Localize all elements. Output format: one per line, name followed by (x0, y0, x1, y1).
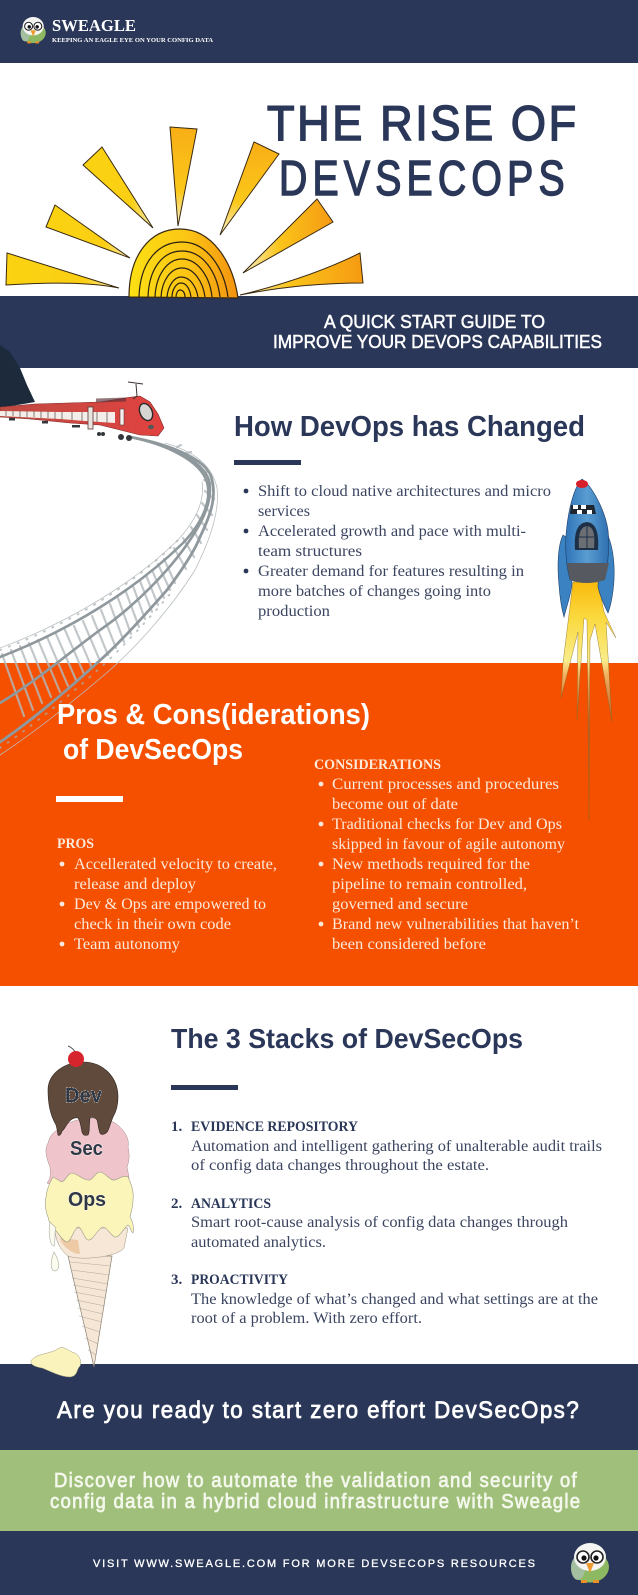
bullet list: how DevOps has changed: team structures (258, 543, 362, 560)
logo tagline: KEEPING AN EAGLE EYE ON YOUR CONFIG DATA (52, 37, 213, 44)
illustration: rocket (558, 479, 616, 820)
item 3: proactivity: 3. (171, 1272, 182, 1288)
item 2: analytics: automated analytics. (191, 1234, 326, 1251)
bullet list: how DevOps has changed: Greater demand for features resulting in (258, 563, 524, 580)
cherry (68, 1046, 84, 1067)
call to action band (0, 1364, 638, 1450)
discover text (50, 1470, 580, 1513)
heading: How DevOps has Changed: How DevOps has Changed (234, 411, 585, 443)
item 3: proactivity: The knowledge of what’s changed and what settings are at the (191, 1291, 598, 1308)
heading: Pros & Cons(iderations) of DevSecOps (57, 699, 370, 766)
pros list: PROS (57, 836, 94, 852)
footer link text: VISIT WWW.SWEAGLE.COM FOR MORE DEVSECOPS RESOURCES (93, 1558, 535, 1570)
item 3: proactivity (171, 1272, 598, 1327)
heading: Pros & Cons(iderations) of DevSecOps: Pros & Cons(iderations) (57, 699, 370, 731)
rocket fins (558, 532, 614, 617)
subtitle text: IMPROVE YOUR DEVOPS CAPABILITIES (273, 332, 602, 352)
bullet list: how DevOps has changed: services (258, 503, 310, 520)
panel: pros and considerations (56, 699, 580, 953)
heading: Pros & Cons(iderations) of DevSecOps: of DevSecOps (63, 734, 243, 766)
pros list: check in their own code (74, 916, 231, 933)
pros list: Accellerated velocity to create, (74, 856, 277, 873)
item 1: evidence repository: EVIDENCE REPOSITORY (191, 1119, 358, 1135)
item 1: evidence repository: 1. (171, 1119, 182, 1135)
scoop labels (65, 1085, 106, 1211)
footer band (0, 1531, 638, 1595)
cone (68, 1256, 112, 1367)
item 1: evidence repository (171, 1119, 602, 1174)
heading rule (171, 1085, 238, 1090)
considerations list: Traditional checks for Dev and Ops (332, 816, 562, 833)
heading: The 3 Stacks of DevSecOps: The 3 Stacks of DevSecOps (171, 1023, 523, 1054)
considerations list: Brand new vulnerabilities that haven’t (332, 916, 580, 933)
subtitle text: A QUICK START GUIDE TO (324, 312, 545, 332)
train body (0, 382, 164, 441)
flame (561, 582, 616, 820)
Dev scoop (48, 1062, 118, 1135)
considerations list: governed and secure (332, 896, 468, 913)
bullet list: how DevOps has changed: Accelerated growth and pace with multi- (258, 523, 526, 540)
Ops scoop (45, 1172, 133, 1242)
item 2: analytics: 2. (171, 1196, 182, 1212)
considerations list: skipped in favour of agile autonomy (332, 836, 565, 853)
illustration: rising sun (6, 127, 363, 298)
title: THE RISE OF (267, 95, 576, 150)
green discover band (0, 1450, 638, 1531)
item 1: evidence repository: of config data changes throughout the estate. (191, 1157, 489, 1174)
call to action text: Are you ready to start zero effort DevSecOps? (57, 1396, 579, 1423)
numbered list: three stacks (171, 1119, 602, 1327)
considerations list: pipeline to remain controlled, (332, 876, 527, 893)
rocket body (566, 479, 609, 580)
heading rule (56, 796, 123, 802)
logo wordmark: SWEAGLE (52, 16, 136, 35)
bullet list: how DevOps has changed (244, 483, 551, 620)
item 2: analytics: ANALYTICS (191, 1196, 271, 1212)
melted puddle (31, 1348, 81, 1377)
illustration: ice cream cone (31, 1046, 133, 1377)
Sec scoop (46, 1118, 129, 1186)
considerations list: Current processes and procedures (332, 776, 559, 793)
icon: Sweagle owl logo (21, 17, 46, 43)
considerations list: been considered before (332, 936, 486, 953)
item 3: proactivity: root of a problem. With zero effort. (191, 1310, 422, 1327)
discover text: config data in a hybrid cloud infrastructure with Sweagle (50, 1491, 580, 1513)
icon: Sweagle owl mascot (571, 1543, 609, 1583)
considerations list: become out of date (332, 796, 458, 813)
discover text: Discover how to automate the validation and security of (54, 1470, 577, 1492)
scoop labels: Sec (70, 1138, 103, 1160)
pros list: release and deploy (74, 876, 196, 893)
item 3: proactivity: PROACTIVITY (191, 1272, 288, 1288)
scoop labels: Ops (68, 1189, 106, 1211)
illustration: train on curving railway (0, 345, 218, 755)
scoop labels: Dev (65, 1085, 103, 1107)
bullet list: how DevOps has changed: Shift to cloud native architectures and micro (258, 483, 551, 500)
title: DEVSECOPS (279, 152, 565, 206)
bullet list: how DevOps has changed: more batches of changes going into (258, 583, 491, 600)
orange panel background (0, 663, 638, 986)
pros list (57, 836, 277, 953)
subtitle band (0, 296, 638, 368)
title (267, 95, 576, 206)
considerations list: CONSIDERATIONS (314, 757, 441, 773)
considerations list: New methods required for the (332, 856, 530, 873)
bullet list: how DevOps has changed: production (258, 603, 330, 620)
header band (0, 0, 638, 63)
subtitle text (273, 312, 602, 352)
pros list: Dev & Ops are empowered to (74, 896, 266, 913)
pros list: Team autonomy (74, 936, 180, 953)
considerations list (314, 757, 580, 953)
item 2: analytics: Smart root-cause analysis of config data changes through (191, 1214, 568, 1231)
heading rule (234, 460, 301, 465)
item 1: evidence repository: Automation and intelligent gathering of unalterable audit trails (191, 1138, 602, 1155)
item 2: analytics (171, 1196, 568, 1251)
